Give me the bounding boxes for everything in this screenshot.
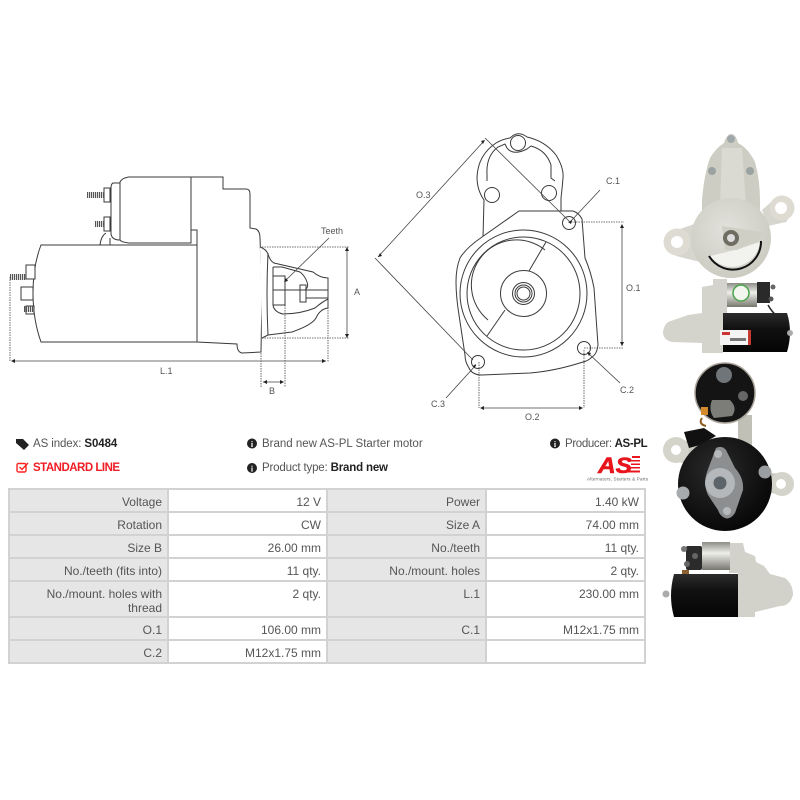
diagram: side view of starter motor: B bbox=[269, 386, 275, 396]
diagram: side view of starter motor bbox=[10, 177, 360, 396]
brand new description: Brand new AS-PL Starter motor bbox=[262, 438, 423, 450]
dimension lines bbox=[10, 238, 349, 387]
dimension lines bbox=[375, 138, 624, 408]
icon: info circle (producer) bbox=[550, 438, 560, 449]
diagram: front view of starter motor: C.3 bbox=[431, 399, 445, 409]
diagram: side view of starter motor: L.1 bbox=[160, 366, 173, 376]
specification table: No./teeth bbox=[431, 541, 480, 555]
icon: checked box bbox=[17, 463, 28, 472]
specification table: C.2 bbox=[143, 646, 162, 660]
diagram: front view of starter motor: C.2 bbox=[620, 385, 634, 395]
specification table: Power bbox=[446, 495, 480, 509]
specification table: 230.00 mm bbox=[579, 587, 639, 601]
product type: Product type: Brand new bbox=[262, 462, 388, 474]
motor body bbox=[33, 245, 197, 342]
specification table: Size A bbox=[446, 518, 480, 532]
logo: AS-PL bbox=[587, 453, 649, 482]
icon: info circle (brand new) bbox=[247, 438, 257, 449]
icon: info circle (product type): i bbox=[251, 464, 254, 474]
specification table: 74.00 mm bbox=[586, 518, 639, 532]
standard line label: STANDARD LINE bbox=[33, 462, 120, 474]
solenoid bbox=[111, 177, 191, 243]
AS index: AS index: S0484 bbox=[33, 438, 117, 450]
specification table: No./teeth (fits into) bbox=[64, 564, 162, 578]
specification table: 26.00 mm bbox=[268, 541, 321, 555]
specification table: thread bbox=[128, 601, 162, 615]
specification table: C.1 bbox=[461, 623, 480, 637]
specification table: M12x1.75 mm bbox=[563, 623, 639, 637]
logo: AS-PL: AS bbox=[597, 453, 632, 478]
specification table: CW bbox=[301, 518, 321, 532]
photo: starter side view (rear) bbox=[662, 542, 793, 617]
drive nose bbox=[260, 247, 328, 338]
terminal studs bbox=[21, 188, 110, 314]
specification table: 11 qty. bbox=[605, 541, 639, 555]
icon: info circle (brand new): i bbox=[251, 440, 254, 449]
specification table: M12x1.75 mm bbox=[245, 646, 321, 660]
diagram: front view of starter motor bbox=[375, 134, 641, 422]
specification table: No./mount. holes bbox=[389, 564, 480, 578]
specification table bbox=[8, 488, 646, 664]
diagram: front view of starter motor: O.1 bbox=[626, 283, 641, 293]
specification table: Size B bbox=[127, 541, 162, 555]
specification table: Rotation bbox=[117, 518, 162, 532]
specification table: 106.00 mm bbox=[261, 623, 321, 637]
diagram: front view of starter motor: O.3 bbox=[416, 190, 431, 200]
specification table: L.1 bbox=[463, 587, 480, 601]
photo: starter front view bbox=[664, 134, 794, 278]
specification table: 1.40 kW bbox=[595, 495, 639, 509]
photo: starter side view (label side) bbox=[663, 279, 793, 353]
specification table: 2 qty. bbox=[293, 587, 321, 601]
specification table: O.1 bbox=[143, 623, 162, 637]
diagram: front view of starter motor: O.2 bbox=[525, 412, 540, 422]
producer: Producer: AS-PL bbox=[565, 438, 647, 450]
specification table: 12 V bbox=[296, 495, 321, 509]
mounting flange bbox=[456, 211, 598, 375]
specification table: Voltage bbox=[122, 495, 162, 509]
logo: AS-PL: Alternators, Starters & Parts bbox=[587, 476, 649, 482]
gear housing bbox=[191, 177, 262, 353]
specification table: 2 qty. bbox=[611, 564, 639, 578]
icon: info circle (product type) bbox=[247, 463, 257, 474]
concentric housing rings bbox=[460, 230, 587, 357]
photo: starter rear view bbox=[663, 363, 794, 531]
diagram: side view of starter motor: A bbox=[354, 287, 360, 297]
specification table: No./mount. holes with bbox=[47, 587, 162, 601]
icon: info circle (producer): i bbox=[554, 440, 557, 449]
diagram: side view of starter motor: Teeth bbox=[321, 226, 343, 236]
diagram: front view of starter motor: C.1 bbox=[606, 176, 620, 186]
specification table: 11 qty. bbox=[287, 564, 321, 578]
icon: price tags bbox=[16, 439, 29, 450]
upper mounting lobe bbox=[477, 134, 563, 237]
bolt holes bbox=[562, 216, 576, 230]
